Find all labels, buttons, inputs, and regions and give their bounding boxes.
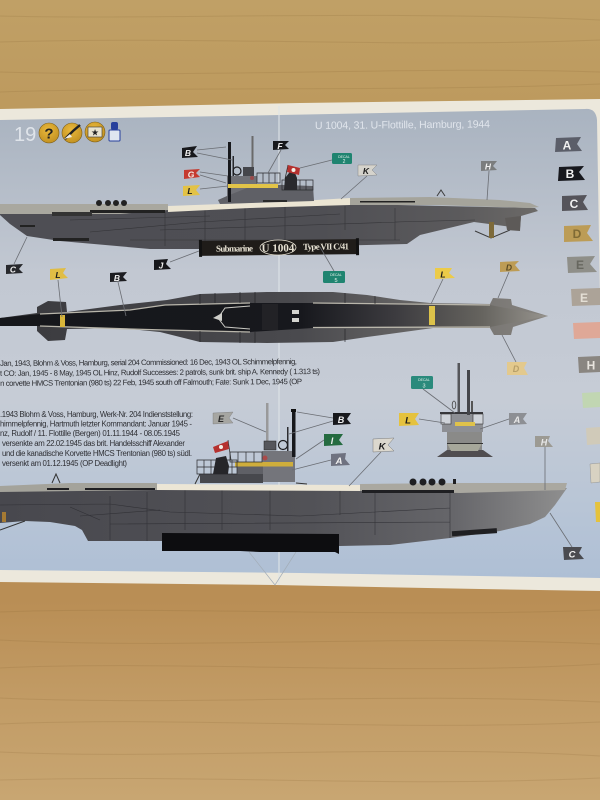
page number and tool icons <box>14 122 120 146</box>
callout flag: F <box>273 141 289 151</box>
callout: decal 3 <box>411 376 433 390</box>
key flag B: B <box>566 167 575 181</box>
callout flag: A lower: A <box>335 456 343 467</box>
German service history text: und die kanadische Korvette HMCS Trentonian (980 ts) südl. <box>2 449 192 458</box>
callout flag: A tower <box>509 413 527 425</box>
callout flag: A tower: A <box>513 415 520 425</box>
English service history text <box>0 357 320 388</box>
callout flag: C lower right: C <box>569 550 576 560</box>
callout flag: L right: L <box>440 270 446 280</box>
key flag C: C <box>570 197 579 211</box>
icon: question mark: ? <box>44 126 54 142</box>
icon: paint brush <box>62 123 82 143</box>
callout flag: E lower <box>213 412 233 424</box>
bow anchor gear <box>437 190 510 238</box>
German service history text: .1943 Blohm & Voss, Hamburg, Werk-Nr. 204 Indienststellung: <box>0 410 193 419</box>
callout: decal 3: 3 <box>422 384 426 390</box>
callout flag: H lower <box>535 436 553 448</box>
icon: glue bottle <box>109 122 120 141</box>
hull <box>0 204 538 249</box>
foredeck <box>350 197 539 208</box>
callout flag: I <box>324 434 343 446</box>
callout flag: B lower: B <box>338 415 345 425</box>
yellow bands <box>60 315 65 327</box>
callout: decal 2: 2 <box>343 159 346 165</box>
English service history text: n corvette HMCS Trentonian (980 ts) 22 Feb, 1945 south off Falmouth; Fate: Sunk 1 Dec, 1945 (OP <box>0 377 302 388</box>
German service history text: versenkt am 01.12.1945 (OP Deadlight) <box>2 459 127 468</box>
callout flag: B upper <box>182 146 198 158</box>
German service history text: versenkte am 22.02.1945 das brit. Handelsschiff Alexander <box>2 439 185 448</box>
key flag C <box>562 195 588 211</box>
callout: decal 2: DECAL <box>338 155 350 159</box>
name plate <box>199 238 359 257</box>
key flag A: A <box>563 138 572 152</box>
callout flag: L upper: L <box>187 186 193 196</box>
callout flag: D lower: D <box>513 364 520 374</box>
tower outline on top view <box>218 306 250 329</box>
icon: decal: ★ <box>91 128 99 138</box>
callout flag: G: G <box>188 170 195 180</box>
key flag H <box>578 356 600 373</box>
hull plating <box>0 490 450 541</box>
key flag E: E <box>576 258 584 272</box>
callout flag: L left: L <box>55 270 61 280</box>
cream deck lines <box>40 303 490 332</box>
key flag L <box>595 502 600 522</box>
key flag B <box>558 166 585 181</box>
callout flag: H lower: H <box>541 438 548 448</box>
callout flag: H upper <box>481 161 497 172</box>
callout flag: K lower <box>373 438 394 452</box>
name plate: Type VII C/41 <box>303 241 350 252</box>
title: U 1004, 31. U-Flottille, Hamburg, 1944 <box>315 118 490 132</box>
leader line to flag C lower <box>550 513 572 547</box>
key flag E <box>567 256 597 273</box>
callout leader lines <box>14 147 545 490</box>
black name bar <box>162 533 339 554</box>
cream walkway <box>168 198 350 212</box>
key flag D <box>564 225 593 242</box>
callout flag: H upper: H <box>485 162 492 172</box>
key flag F: E <box>580 291 588 305</box>
key flag G <box>573 322 600 339</box>
callout: decal 2 <box>332 153 352 165</box>
callout flag: L left <box>50 268 68 280</box>
German service history text: himmelpfennig, Hartmuth letzter Kommandant: Januar 1945 - <box>0 420 192 428</box>
callout flag: A lower <box>331 453 350 467</box>
callout flag: J: J <box>159 260 164 270</box>
flag on tower <box>213 440 231 460</box>
callout flag: L right <box>435 268 455 280</box>
side view submarine, upper <box>0 136 539 249</box>
name plate: Submarine <box>216 243 253 254</box>
callout flag: B lower <box>333 413 351 425</box>
page number: 19 <box>14 124 36 146</box>
panel joints <box>200 292 375 343</box>
callout flag: B upper: B <box>185 148 191 158</box>
rear deck <box>0 204 168 214</box>
hull <box>0 488 567 546</box>
callout flag: J <box>154 259 171 270</box>
key flag J <box>586 427 600 445</box>
callout flag: I: I <box>331 436 334 446</box>
callout: decal 3: DECAL <box>418 378 430 382</box>
deck vents <box>20 200 415 241</box>
key flag K <box>590 463 600 483</box>
callout: decal 5 <box>323 271 345 284</box>
net cutter and stern strut <box>0 474 60 530</box>
flag on tower <box>285 165 300 179</box>
name plate: U 1004 <box>262 242 295 255</box>
English service history text: t CO: Jan, 1945 - 8 May, 1945 OL Hinz, Rudolf Successes: 2 patrols, sunk brit. ship A. Kennedy ( 1.313 ts) <box>0 367 320 378</box>
callout flag: G <box>184 169 200 180</box>
callout flag: B left: B <box>114 273 120 283</box>
key flag I <box>582 392 600 408</box>
key flag F <box>571 288 600 306</box>
deck slots and guns <box>47 478 497 536</box>
colour key column <box>555 137 600 522</box>
white sheet margin <box>0 99 600 591</box>
callout flag: C left <box>6 264 23 274</box>
callout flag: D upper: D <box>506 262 512 272</box>
callout flag: F: F <box>277 141 283 151</box>
callout flag: D upper <box>500 261 520 272</box>
key flag H: H <box>587 358 595 372</box>
top view submarine <box>0 292 548 343</box>
callout flag: L upper <box>183 185 200 196</box>
conning tower <box>195 403 307 484</box>
callout flag: C lower right <box>563 547 584 560</box>
tower front view <box>437 363 493 457</box>
conning tower <box>218 136 314 204</box>
German service history text: nz, Rudolf / 11. Flottille (Bergen) 01.11.1944 - 08.05.1945 <box>0 429 181 438</box>
callout flag: L tower <box>399 413 419 426</box>
centre fold crease <box>249 106 296 585</box>
callout flag: D lower <box>507 362 528 375</box>
callout: decal 5: DECAL <box>330 273 342 277</box>
foredeck <box>360 483 567 493</box>
callout flag: K upper <box>358 165 377 176</box>
German service history text <box>0 410 193 468</box>
rear deck <box>0 483 157 492</box>
callout: decal 5: 5 <box>334 278 338 284</box>
callout flag: K upper: K <box>363 166 370 176</box>
blue sheet panel <box>0 109 600 578</box>
black deck <box>0 303 548 332</box>
English service history text: Jan, 1943, Blohm & Voss, Hamburg, serial 204 Commissioned: 16 Dec, 1943 OL Schimmelpfennig, <box>0 357 297 368</box>
outer hull <box>0 292 548 343</box>
callout flag: C left: C <box>10 264 17 274</box>
key flag D: D <box>573 227 582 241</box>
callout flag: L tower: L <box>405 416 411 426</box>
callout flag: E lower: E <box>218 414 225 424</box>
cream walkway <box>157 484 360 491</box>
key flag A <box>555 137 582 152</box>
hull plating <box>70 206 475 248</box>
callout flag: K lower: K <box>379 442 387 452</box>
side view submarine, lower <box>0 403 567 554</box>
callout flag: B left <box>110 272 127 283</box>
